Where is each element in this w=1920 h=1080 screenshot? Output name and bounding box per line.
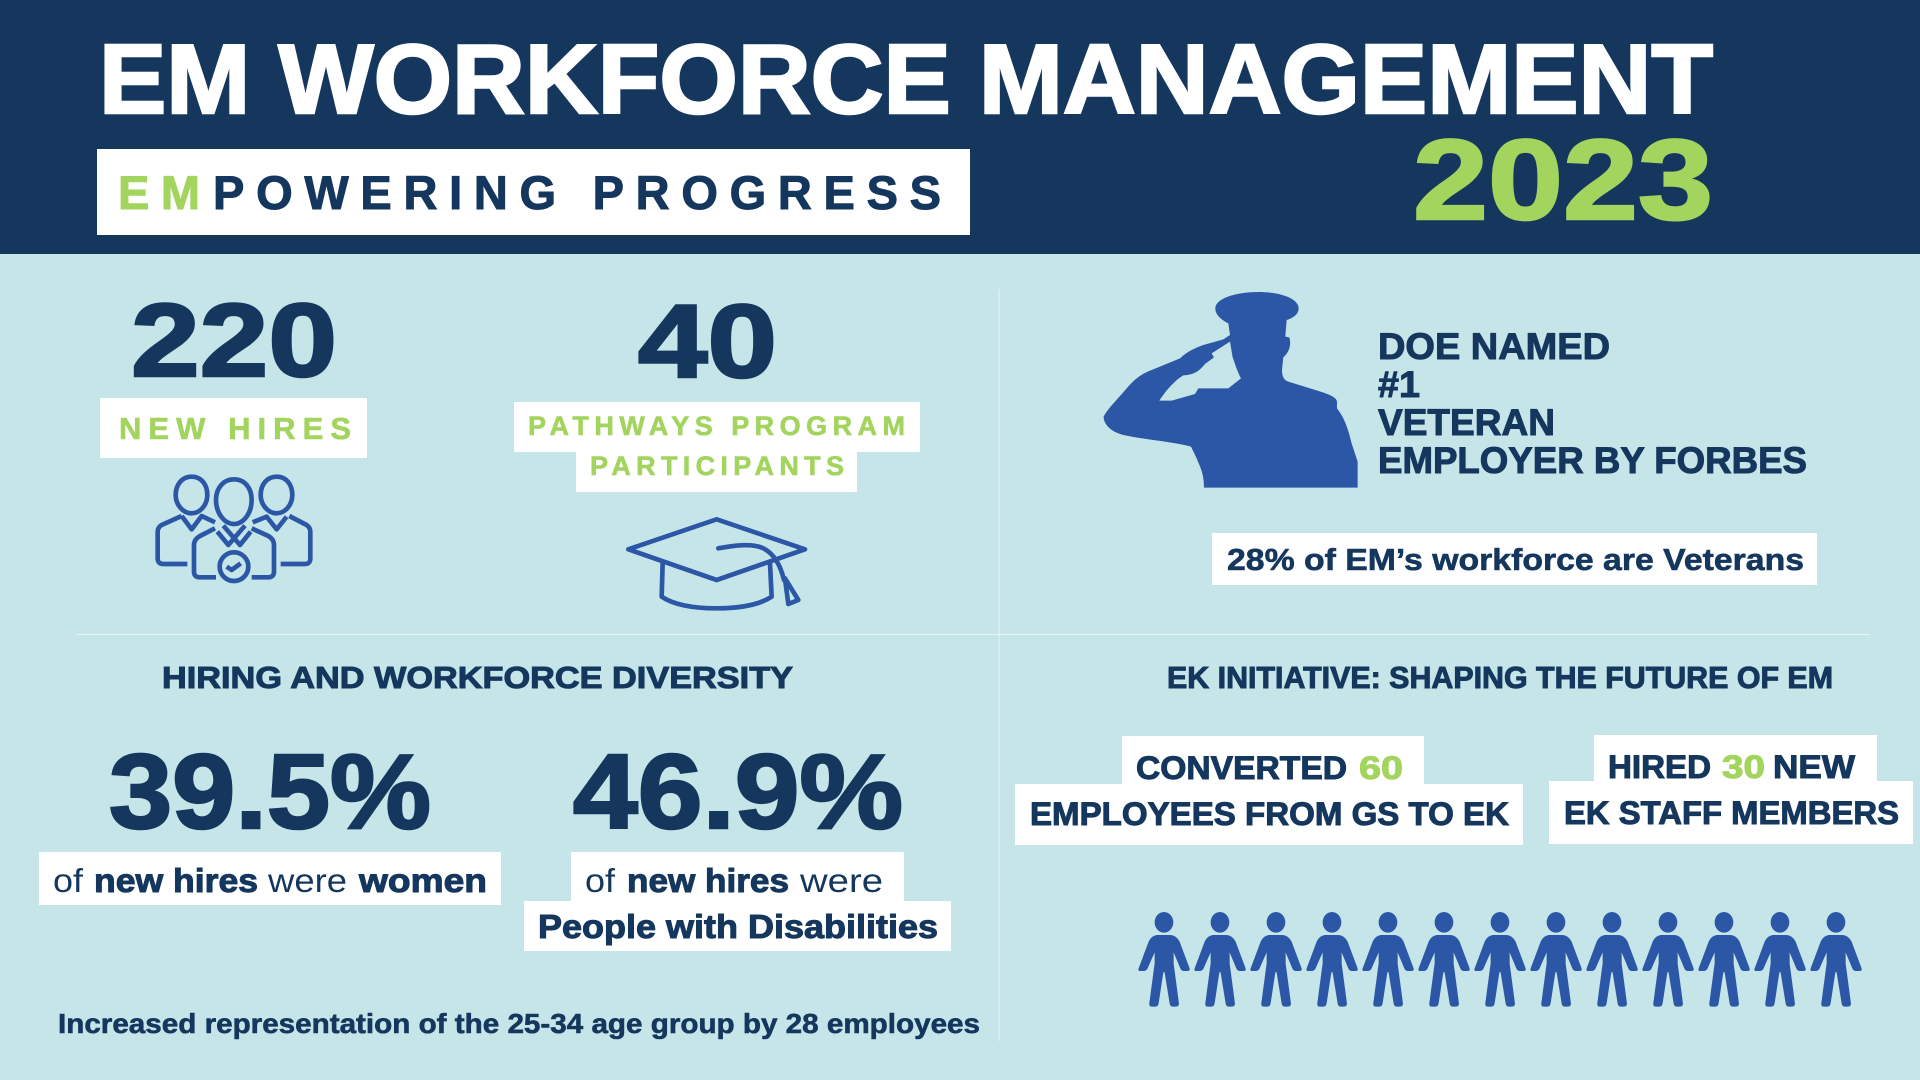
heading: EK initiative: EK INITIATIVE: SHAPING THE FUTURE OF EM <box>1167 660 1833 695</box>
year 2023: 2023 <box>1413 117 1713 244</box>
veteran employer text: #1 <box>1378 364 1420 405</box>
icon: group of people <box>158 477 310 581</box>
label: people with disabilities: new hires <box>627 862 789 899</box>
heading: diversity: HIRING AND WORKFORCE DIVERSITY <box>162 660 793 695</box>
label: hired 30: HIRED <box>1608 749 1711 785</box>
icon row: people <box>1138 912 1862 1007</box>
label: pathways program participants: PARTICIPANTS <box>590 451 844 481</box>
label: converted 60: CONVERTED <box>1136 750 1347 786</box>
icon: graduation cap <box>628 519 805 608</box>
number 40: 40 <box>638 284 777 400</box>
callout: veterans share <box>1212 533 1817 585</box>
stat: 46.9%: 46.9% <box>573 733 903 851</box>
label: hired 30: NEW <box>1773 749 1856 785</box>
subtitle: empowering progress <box>97 149 970 235</box>
panel: hiring and workforce diversity <box>39 660 980 1039</box>
label: women: were <box>267 862 347 899</box>
label: hired 30: EK STAFF MEMBERS <box>1564 795 1899 831</box>
label: people with disabilities: were <box>799 862 883 899</box>
stat: 39.5%: 39.5% <box>109 733 431 851</box>
label: converted 60 <box>1015 736 1523 845</box>
label: people with disabilities: of <box>585 862 616 899</box>
icon: saluting soldier <box>1104 292 1358 488</box>
label: women: women <box>358 862 487 899</box>
stat: 40 pathways participants <box>514 284 920 608</box>
label: women: new hires <box>94 862 258 899</box>
label: hired 30 <box>1549 735 1913 844</box>
label: converted 60: EMPLOYEES FROM GS TO EK <box>1030 796 1509 832</box>
veteran employer text <box>1378 326 1807 481</box>
panel: EK initiative <box>1015 660 1913 1007</box>
header band <box>0 0 1920 254</box>
label: converted 60: 60 <box>1359 750 1403 786</box>
label: people with disabilities <box>524 852 951 951</box>
subtitle: empowering progress: POWERING PROGRESS <box>213 166 941 219</box>
label: pathways program participants: PATHWAYS PROGRAM <box>528 411 905 441</box>
panel: veteran employer <box>1104 292 1817 585</box>
stat: 220 new hires <box>100 283 367 581</box>
veteran employer text: EMPLOYER BY FORBES <box>1378 440 1807 481</box>
label: women: of <box>53 862 84 899</box>
note: age group: Increased representation of the 25-34 age group by 28 employees <box>58 1008 980 1039</box>
number 220: 220 <box>131 283 337 399</box>
callout: veterans share: 28% of EM’s workforce are Veterans <box>1227 542 1804 577</box>
label: people with disabilities: People with Disabilities <box>538 908 938 945</box>
veteran employer text: VETERAN <box>1378 402 1555 443</box>
veteran employer text: DOE NAMED <box>1378 326 1610 367</box>
label: new hires: NEW HIRES <box>119 411 351 446</box>
subtitle: empowering progress: EM <box>118 166 200 219</box>
title: EM WORKFORCE MANAGEMENT <box>99 24 1713 134</box>
label: new hires <box>100 398 367 458</box>
label: women <box>39 852 501 905</box>
label: pathways program participants <box>514 402 920 492</box>
label: hired 30: 30 <box>1722 749 1765 785</box>
